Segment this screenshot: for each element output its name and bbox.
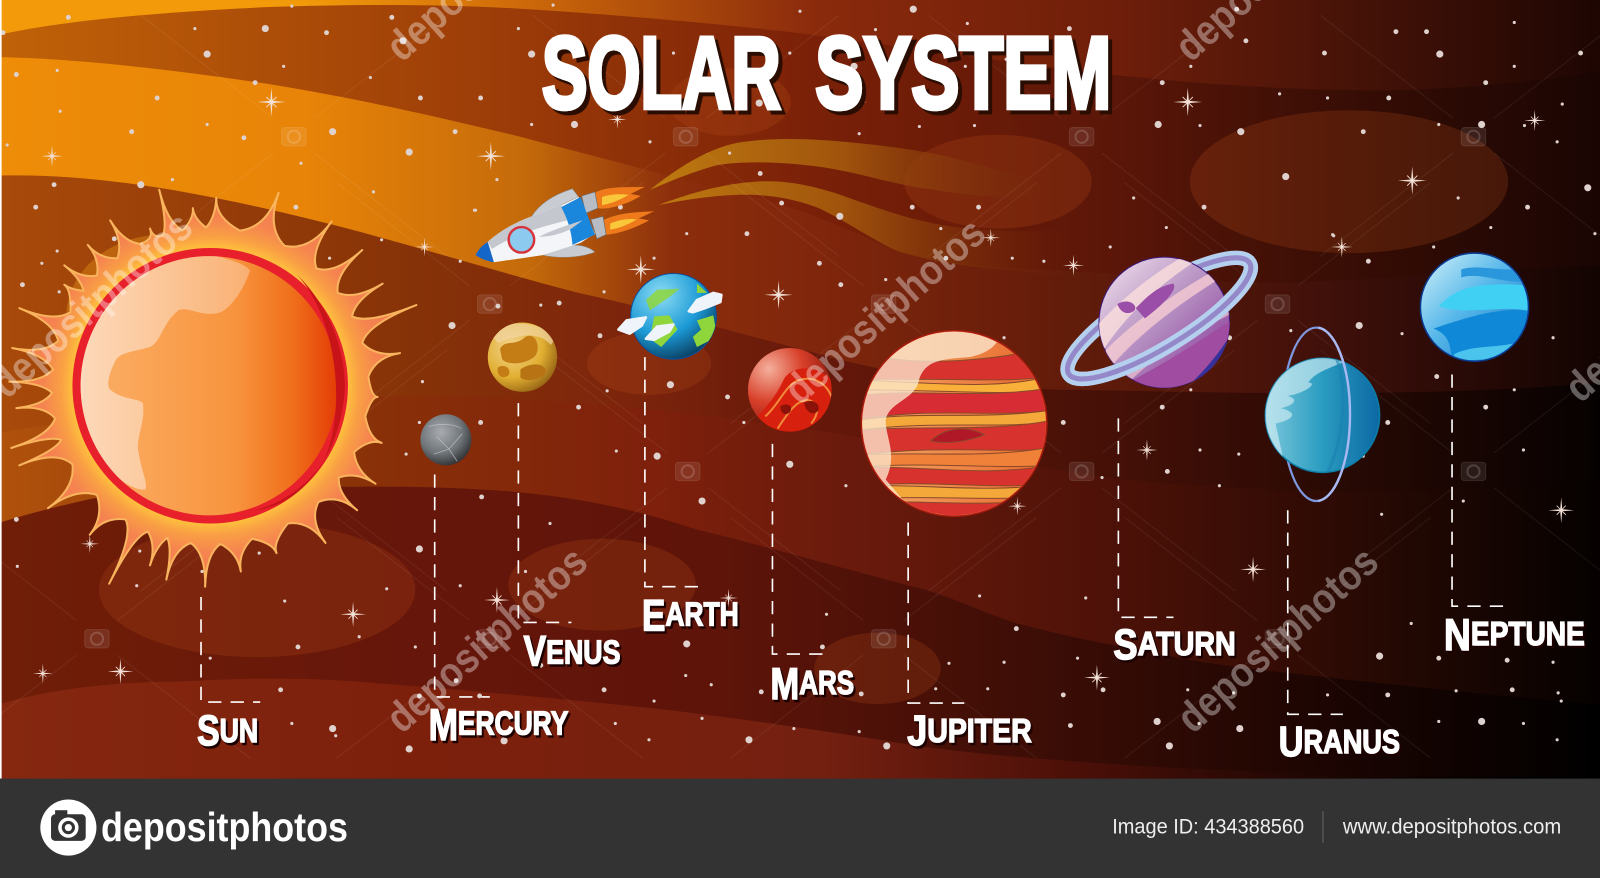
label: mars: M: [770, 658, 799, 709]
label: mercury: M: [429, 699, 458, 750]
footer logo icon: [40, 800, 96, 856]
label: mercury: ERCURY: [458, 706, 568, 743]
title: [542, 16, 1111, 130]
footer bar: [0, 779, 1600, 878]
rocket body: [476, 197, 595, 262]
diagonal watermarks: depositphotos: [1167, 537, 1387, 741]
label: mars: ARS: [799, 665, 854, 702]
divider: [1322, 811, 1323, 843]
saturn body: [1099, 257, 1230, 388]
left edge line: [0, 0, 2, 779]
planet: venus: [488, 322, 557, 392]
comet tails behind rocket: [650, 139, 1071, 276]
label: saturn: S: [1113, 621, 1138, 669]
sun highlight: [80, 256, 250, 490]
rocket window: [509, 227, 534, 253]
label: earth: ARTH: [665, 597, 739, 634]
dashed label connectors: [201, 357, 1507, 714]
planet: uranus: [1265, 328, 1380, 501]
saturn ring front: [1062, 259, 1258, 386]
sun rays: [9, 190, 416, 587]
saturn ring back: [1054, 239, 1265, 398]
sun disc: [81, 256, 338, 515]
image id: Image ID: 434388560: [1112, 815, 1304, 839]
sparkle stars: [33, 88, 1574, 690]
label: uranus: RANUS: [1304, 724, 1400, 761]
earth clouds: [618, 293, 721, 340]
label: uranus: U: [1279, 718, 1304, 766]
planet: jupiter: [860, 330, 1048, 518]
uranus body: [1265, 358, 1380, 472]
label: neptune: N: [1444, 609, 1471, 660]
rocket fin centre: [539, 220, 583, 237]
uranus ring back: [1283, 328, 1350, 501]
label: jupiter: J: [907, 707, 927, 755]
planet: neptune: [1420, 253, 1531, 367]
rocket blue band: [561, 197, 595, 245]
rocket fins: [532, 189, 595, 257]
title: SOLAR: [542, 16, 781, 130]
label: earth: E: [642, 590, 665, 641]
footer logo text: depositphotos: [101, 804, 348, 850]
label: jupiter: UPITER: [927, 713, 1032, 750]
rocket flames: [595, 187, 654, 235]
label: venus: ENUS: [546, 634, 620, 671]
uranus ring front: [1318, 326, 1352, 502]
sun red ring: [72, 248, 348, 523]
rocket nose: [476, 242, 494, 262]
planet: earth: [618, 273, 721, 359]
label: sun: UN: [220, 713, 258, 750]
label: saturn: ATURN: [1138, 626, 1236, 663]
label: venus: V: [523, 627, 546, 675]
planet: mercury: [420, 414, 471, 465]
diagonal watermarks: depositphotos: [377, 537, 596, 741]
diagonal watermarks: depositphotos: [775, 209, 994, 413]
website url: www.depositphotos.com: [1342, 815, 1561, 839]
label: sun: S: [197, 707, 220, 755]
rocket: [476, 187, 654, 262]
planet: saturn: [1060, 250, 1258, 388]
rocket nozzles: [582, 192, 606, 239]
sun crescent shade: [255, 273, 345, 510]
planet: mars: [748, 348, 832, 432]
title: SYSTEM: [815, 16, 1111, 130]
sun: [9, 190, 416, 587]
